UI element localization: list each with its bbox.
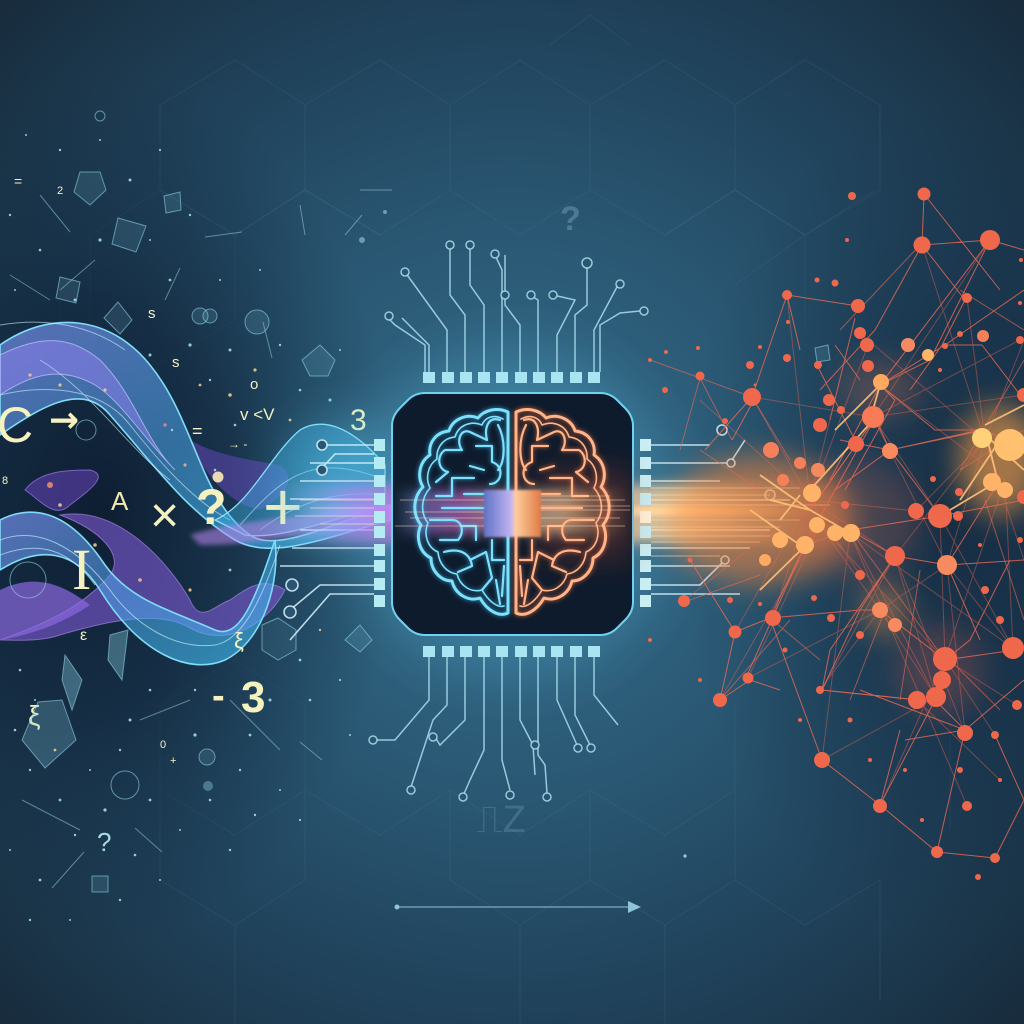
glow behind chip xyxy=(295,347,672,677)
bright network strands xyxy=(750,385,1024,590)
left math symbols: v <V xyxy=(240,405,275,424)
chip body xyxy=(392,393,633,635)
bright hub nodes xyxy=(759,338,1024,566)
left math symbols: = xyxy=(14,173,22,189)
geometric fragments xyxy=(10,111,830,892)
left math symbols: - xyxy=(212,675,225,717)
dark haze left xyxy=(0,70,400,950)
left math symbols xyxy=(0,173,367,857)
left math symbols: → xyxy=(49,400,79,441)
left math symbols: 0 xyxy=(160,739,166,751)
chip pads left xyxy=(374,439,385,607)
top circuit traces xyxy=(385,241,648,372)
dark haze right xyxy=(680,100,1024,940)
purple streak to chip xyxy=(190,508,390,545)
purple ribbon back xyxy=(0,514,285,640)
left math symbols: I xyxy=(72,537,91,602)
left math symbols: A xyxy=(111,486,129,516)
chip pads top xyxy=(423,372,600,383)
violet tail xyxy=(0,582,90,640)
left math symbols: ? xyxy=(97,827,111,857)
beam streak lines xyxy=(295,488,830,556)
left math symbols: 3 xyxy=(241,673,265,722)
faint center top and bottom glyphs xyxy=(476,200,581,841)
left math symbols: o xyxy=(250,376,258,393)
upper ribbon xyxy=(0,322,390,548)
right rising wave xyxy=(215,424,385,536)
scattered particles left xyxy=(9,134,687,921)
beam through chip xyxy=(393,490,632,534)
faint center top and bottom glyphs: ? xyxy=(560,200,581,238)
thin scattered lines xyxy=(10,190,392,888)
left math symbols: s xyxy=(172,354,180,371)
left math symbols: 2 xyxy=(57,185,63,197)
energy beam xyxy=(270,485,850,543)
left math symbols: + xyxy=(263,469,303,545)
right network glow xyxy=(665,360,1024,715)
bottom arrow xyxy=(394,901,641,913)
left math symbols: + xyxy=(170,755,176,767)
left math symbols: s xyxy=(148,305,156,322)
central processor core xyxy=(484,490,541,537)
left math symbols: ε xyxy=(80,627,87,644)
left math symbols: 8 xyxy=(2,475,8,487)
chip inner glow lines xyxy=(395,496,630,526)
left math symbols: ? xyxy=(196,479,227,535)
network nodes xyxy=(648,188,1024,880)
left math symbols: 3 xyxy=(350,404,367,437)
left math symbols: × xyxy=(150,487,179,543)
left ribbons: data waves xyxy=(0,322,390,665)
chip pads right xyxy=(640,439,651,607)
faint center top and bottom glyphs: ⎍Z xyxy=(476,799,526,841)
right side chip tint xyxy=(540,470,631,560)
network edges xyxy=(650,194,1024,858)
left and right circuit traces xyxy=(280,425,790,640)
left math symbols: → - xyxy=(228,437,247,451)
bottom circuit traces xyxy=(369,657,618,801)
lower ribbon xyxy=(0,512,276,665)
left math symbols: ξ xyxy=(234,628,244,653)
brain right hemisphere xyxy=(516,410,609,614)
left math symbols: ξ xyxy=(28,700,41,731)
chip pads bottom xyxy=(423,646,600,657)
left math symbols: = xyxy=(192,421,203,441)
brain left hemisphere xyxy=(415,410,508,614)
